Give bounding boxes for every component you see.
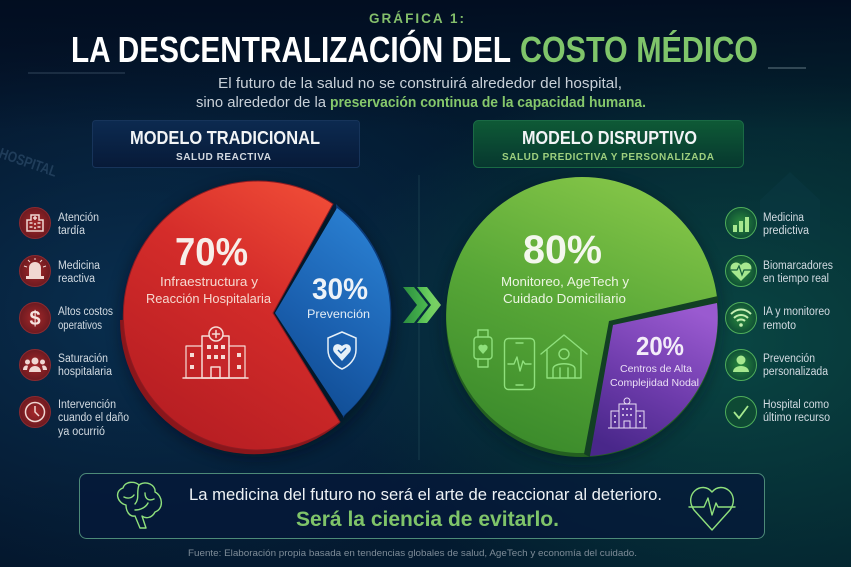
icon: nodal building (608, 398, 647, 428)
slice separator (584, 296, 718, 457)
slice: 30% (275, 208, 390, 416)
panel: modelo tradicional header: MODELO TRADICIONAL (130, 128, 320, 148)
item: saturación hospitalaria: hospitalaria (58, 366, 113, 378)
subtitle line 2: preservación continua de la capacidad humana. (330, 94, 646, 111)
item: intervención cuando el daño ya ocurrió: Intervención (58, 399, 116, 411)
70% caption: Infraestructura y (160, 275, 259, 289)
item: medicina predictiva (726, 208, 810, 238)
item: biomarcadores en tiempo real: Biomarcadores (763, 260, 833, 272)
callout text line 2: Será la ciencia de evitarlo. (296, 508, 559, 531)
item: medicina reactiva (20, 256, 101, 286)
eyebrow: GRÁFICA 1: (369, 11, 464, 26)
item: IA y monitoreo remoto: IA y monitoreo (763, 306, 830, 318)
item: intervención cuando el daño ya ocurrió (20, 396, 129, 438)
source note: Fuente: Elaboración propia basada en tendencias globales de salud, AgeTech y economía del cuidado. (188, 548, 637, 559)
70% caption: Reacción Hospitalaria (146, 292, 271, 306)
80% caption: Cuidado Domiciliario (503, 292, 626, 306)
item: medicina reactiva: Medicina (58, 260, 101, 272)
item: IA y monitoreo remoto: remoto (763, 320, 796, 332)
panel: modelo disruptivo header: MODELO DISRUPTIVO (522, 128, 697, 148)
icon: hospital (183, 327, 248, 378)
item: hospital como último recurso (726, 396, 830, 428)
item: saturación hospitalaria (20, 350, 113, 380)
list: beneficios del modelo disruptivo (726, 208, 833, 428)
30% label: 30% (312, 273, 368, 306)
20% caption (610, 363, 699, 389)
item: intervención cuando el daño ya ocurrió: ya ocurrió (58, 426, 105, 438)
item: medicina reactiva: reactiva (58, 273, 96, 285)
header block (71, 11, 758, 111)
item: atención tardía: Atención (58, 212, 99, 224)
item: altos costos operativos (20, 302, 113, 334)
item: hospital como último recurso: Hospital como (763, 399, 829, 411)
panel: modelo tradicional header (92, 120, 360, 168)
item: altos costos operativos: $ (29, 308, 41, 330)
item: prevención personalizada: Prevención (763, 353, 815, 365)
subtitle line 2: sino alrededor de la (196, 94, 327, 111)
icon: smartwatch (474, 330, 492, 367)
panel: modelo disruptivo header (474, 120, 744, 168)
slice: 20% (590, 303, 718, 456)
panel: modelo tradicional header: SALUD REACTIVA (176, 152, 271, 163)
icon: shield (328, 332, 356, 369)
item: hospital como último recurso: último recurso (763, 412, 830, 424)
slice: 80% (446, 177, 717, 453)
item: prevención personalizada (726, 350, 829, 380)
list: problemas del modelo tradicional (20, 208, 129, 438)
item: prevención personalizada: personalizada (763, 366, 829, 378)
70% label: 70% (175, 231, 248, 274)
icon: home with person (541, 335, 587, 378)
item: intervención cuando el daño ya ocurrió: cuando el daño (58, 412, 129, 424)
item: saturación hospitalaria: Saturación (58, 353, 108, 365)
callout: conclusión (80, 474, 764, 538)
item: IA y monitoreo remoto (726, 302, 830, 334)
item: medicina predictiva: Medicina (763, 212, 805, 224)
80% label: 80% (523, 228, 602, 272)
title highlight: COSTO MÉDICO (520, 29, 758, 70)
item: biomarcadores en tiempo real (726, 256, 833, 286)
icon: heart with pulse (689, 487, 735, 530)
title: LA DESCENTRALIZACIÓN DEL (71, 28, 511, 70)
20% caption: Centros de Alta (620, 363, 692, 375)
icon: smartphone (504, 338, 534, 390)
subtitle line 1: El futuro de la salud no se construirá alrededor del hospital, (218, 75, 622, 92)
pie chart: modelo disruptivo (446, 177, 718, 460)
item: altos costos operativos: operativos (58, 320, 102, 332)
panel: modelo disruptivo header: SALUD PREDICTIVA Y PERSONALIZADA (502, 152, 714, 163)
80% caption: Monitoreo, AgeTech y (501, 275, 630, 289)
item: biomarcadores en tiempo real: en tiempo real (763, 273, 829, 285)
item: medicina predictiva: predictiva (763, 225, 810, 237)
pie chart: modelo tradicional (120, 181, 392, 457)
item: atención tardía (20, 208, 99, 238)
icon: brain (118, 482, 161, 528)
20% label: 20% (636, 331, 684, 361)
item: altos costos operativos: Altos costos (58, 306, 113, 318)
20% caption: Complejidad Nodal (610, 377, 699, 389)
70% caption (146, 275, 271, 306)
subtitle line 2 (196, 94, 646, 111)
item: atención tardía: tardía (58, 225, 86, 237)
slice: 70% (123, 181, 340, 450)
arrow: chevrons (403, 287, 441, 323)
30% caption: Prevención (307, 307, 370, 321)
callout text line 1: La medicina del futuro no será el arte de reaccionar al deterioro. (189, 485, 662, 504)
80% caption (501, 275, 630, 306)
